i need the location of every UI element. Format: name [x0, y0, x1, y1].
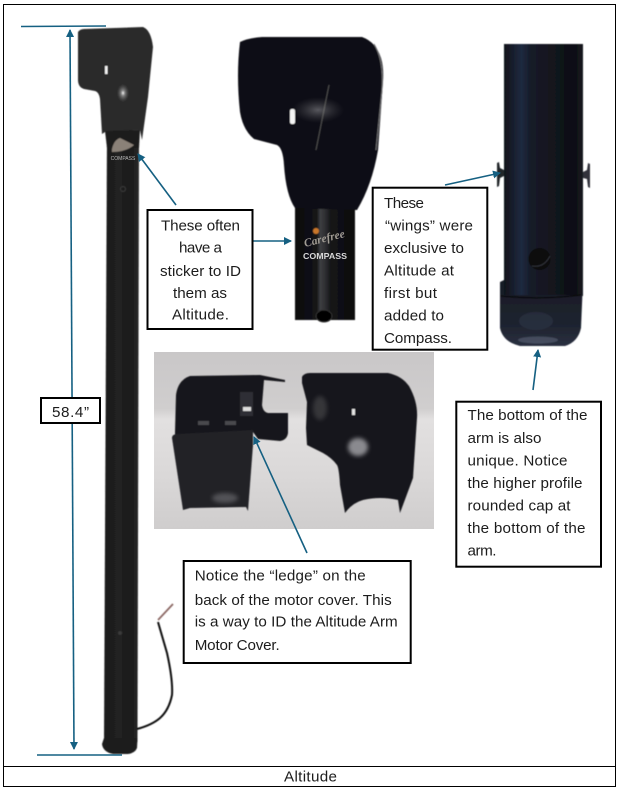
callout: sticker: have a: [179, 240, 223, 256]
arrow: bottom cap: [533, 350, 538, 390]
close-up scratch: [316, 85, 329, 150]
callout: bottom of arm: rounded cap at: [468, 498, 571, 514]
cover ledge tray: [172, 430, 253, 511]
callout: ledge: Motor Cover.: [195, 637, 280, 654]
callout: bottom of arm: arm.: [468, 542, 496, 560]
outer slot: [352, 409, 355, 415]
photo background: [154, 352, 434, 529]
arrow: wings: [445, 173, 500, 185]
callout: sticker: Altitude.: [172, 306, 229, 324]
hole highlight: [532, 256, 550, 266]
head slot: [105, 66, 108, 74]
arrow: sticker on arm: [138, 154, 176, 205]
callout: wings: These: [384, 195, 424, 212]
callout: bottom of arm: [456, 402, 601, 567]
close-up reflection: [292, 97, 344, 123]
photo: motor cover parts: [154, 352, 434, 529]
small screw: [120, 186, 126, 192]
callout: wings: exclusive to: [384, 240, 464, 257]
callout: wings: “wings” were: [385, 218, 473, 234]
tube hole: [528, 248, 550, 270]
callout: sticker: These often: [161, 218, 240, 234]
arm bottom cap: [102, 738, 138, 754]
head highlight: [117, 84, 129, 102]
motor cover head: [78, 27, 153, 140]
rounded bottom cap: [500, 280, 583, 346]
close-up tube: [295, 206, 355, 320]
cap highlight: [518, 336, 558, 344]
inner clip: [240, 392, 253, 416]
lower screw: [118, 631, 122, 635]
arm tube: [104, 135, 139, 742]
inner slot 2: [225, 421, 236, 425]
arrow: ledge: [254, 437, 307, 553]
caption row: Altitude: [284, 769, 337, 786]
head collar: [105, 130, 140, 148]
tray highlight: [212, 493, 238, 503]
close-up edge highlight: [374, 44, 382, 150]
callout: wings: first but: [384, 285, 438, 302]
clip shine: [243, 407, 251, 411]
callout: wings: Compass.: [384, 330, 452, 347]
photo: motor cover close-up: [238, 37, 383, 322]
photo: full Altitude arm: [78, 27, 173, 754]
callout: bottom of arm: unique. Notice: [468, 452, 568, 470]
callout: sticker: sticker to ID: [160, 263, 241, 280]
bottom tube: [504, 44, 583, 296]
left wing: [497, 162, 504, 187]
logo text: close-up: COMPASS: [303, 251, 347, 261]
caption row: [4, 766, 616, 786]
cover inner half: [175, 375, 288, 441]
callout: 58.4 inches: [41, 398, 100, 423]
logo text: arm: COMPASS: [111, 156, 136, 162]
callout: ledge: Notice the “ledge” on the: [195, 568, 366, 584]
cap seam: [501, 295, 581, 298]
callout: 58.4 inches: 58.4”: [52, 404, 89, 421]
outer edge shine: [313, 396, 327, 420]
callout: wings: Altitude at: [384, 262, 455, 280]
wire: [137, 622, 172, 729]
callout: wings: added to: [384, 308, 444, 324]
callout: bottom of arm: the bottom of the: [468, 520, 586, 537]
outer cover half: [302, 373, 417, 513]
outer shine: [348, 438, 368, 456]
close-up slot: [290, 109, 295, 124]
arrow: height dimension: [70, 30, 74, 749]
photo: arm bottom: [497, 44, 590, 346]
logo mark: [112, 138, 134, 152]
callout: sticker: them as: [173, 285, 227, 302]
callout: ledge: back of the motor cover. This: [195, 592, 392, 609]
callout: bottom of arm: the higher profile: [468, 475, 582, 492]
inner slots: [198, 421, 209, 425]
close-up head: [238, 37, 383, 210]
callout: sticker: [148, 210, 252, 329]
wire tip: [158, 604, 173, 620]
callout: ledge: [184, 561, 411, 663]
logo sun: [313, 228, 319, 234]
cap embossed logo: [519, 312, 553, 330]
logo script: Carefree: [303, 228, 346, 250]
dimension bottom line: [37, 754, 122, 756]
arrow: sticker on close-up: [253, 240, 291, 242]
callout: wings: [373, 188, 487, 350]
callout: bottom of arm: arm is also: [468, 430, 542, 447]
dimension top line: [21, 25, 106, 28]
callout: bottom of arm: The bottom of the: [468, 407, 588, 424]
callout: ledge: is a way to ID the Altitude Arm: [195, 614, 398, 630]
right wing: [583, 163, 590, 188]
close-up hole: [316, 310, 332, 322]
